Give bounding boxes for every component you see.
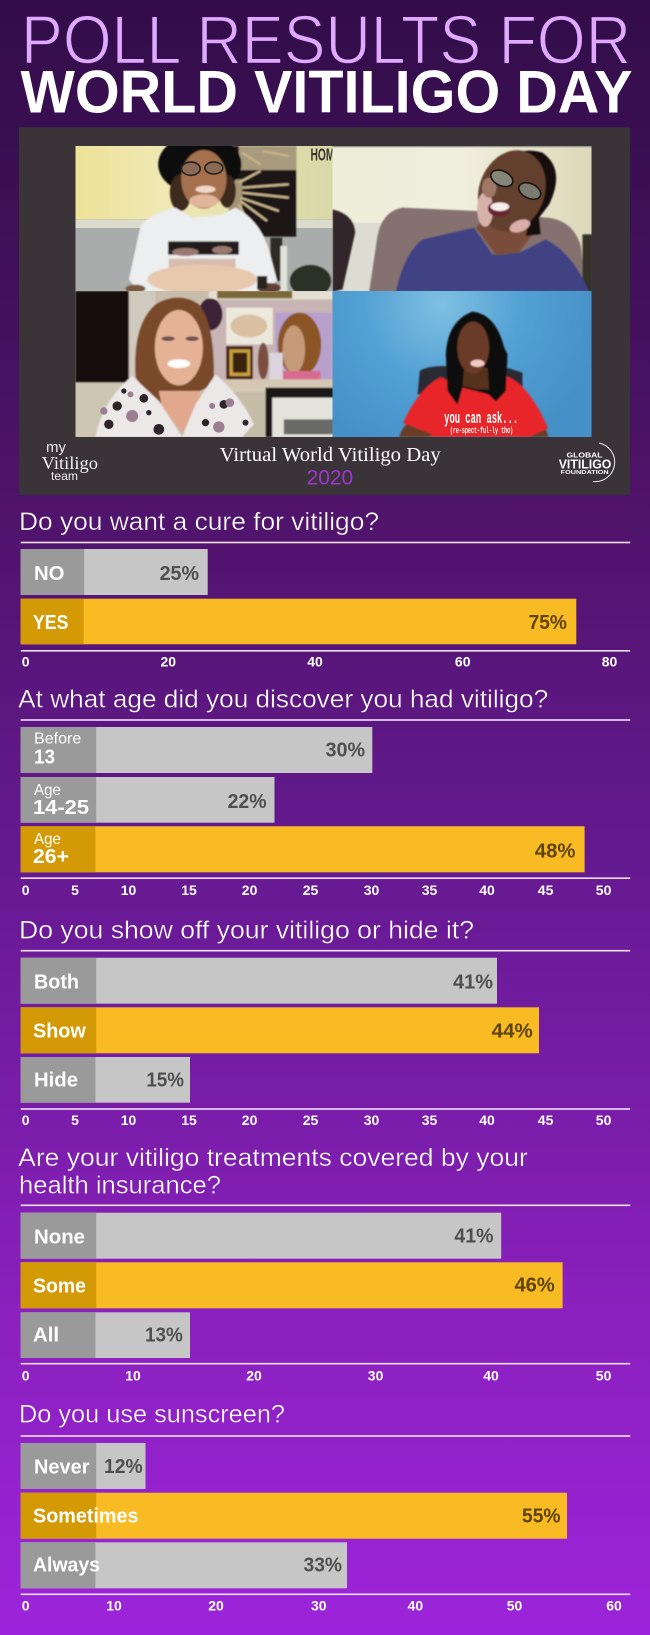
axis labels: 60 bbox=[455, 654, 471, 670]
axis labels: 50 bbox=[596, 882, 612, 898]
bar: age 14-25 22%: 22% bbox=[228, 791, 267, 813]
caption year: 2020 bbox=[307, 466, 353, 490]
bar: both 41% bbox=[21, 958, 497, 1004]
bar: never 12%: 12% bbox=[104, 1456, 143, 1478]
axis labels: 40 bbox=[307, 654, 323, 670]
bar: hide 15%: Hide bbox=[34, 1070, 78, 1092]
axis labels: 25 bbox=[303, 882, 318, 898]
photo: woman in red shirt: you can ask... bbox=[444, 410, 518, 429]
axis labels bbox=[22, 1368, 612, 1384]
bar: before 13 30%: 13 bbox=[34, 746, 55, 768]
panel: video call photo bbox=[19, 127, 630, 495]
photo: woman in black hat bbox=[76, 146, 332, 291]
logo: Global Vitiligo Foundation: FOUNDATION bbox=[561, 470, 609, 476]
axis labels: 5 bbox=[71, 1112, 79, 1128]
question heading: Do you use sunscreen? bbox=[19, 1401, 285, 1429]
bar: age 14-25 22%: 14-25 bbox=[33, 797, 89, 819]
axis labels: 50 bbox=[596, 1368, 612, 1384]
photo: woman in red shirt: (re-spect-ful-ly tho) bbox=[450, 426, 513, 436]
bar: sometimes 55%: Sometimes bbox=[33, 1505, 138, 1527]
bar: no 25% bbox=[21, 549, 208, 595]
axis labels: 10 bbox=[125, 1368, 141, 1384]
axis labels: 50 bbox=[596, 1112, 612, 1128]
axis labels: 0 bbox=[22, 882, 30, 898]
bar: before 13 30%: Before bbox=[34, 730, 81, 747]
bar: sometimes 55%: 55% bbox=[522, 1505, 561, 1527]
bar: yes 75% bbox=[21, 599, 576, 644]
panel: insurance coverage bbox=[18, 1144, 630, 1384]
axis labels: 0 bbox=[22, 1368, 30, 1384]
logo: Global Vitiligo Foundation: GLOBAL bbox=[566, 451, 603, 460]
bar: all 13%: All bbox=[33, 1325, 59, 1347]
logo: myVitiligo team: my bbox=[46, 439, 66, 456]
axis labels: 30 bbox=[364, 882, 379, 898]
bar: yes 75%: YES bbox=[33, 612, 68, 634]
question heading bbox=[18, 1144, 528, 1199]
bar: none 41%: None bbox=[34, 1226, 85, 1248]
logo: Global Vitiligo Foundation bbox=[559, 443, 615, 482]
question heading: Are your vitiligo treatments covered by your bbox=[18, 1144, 528, 1172]
photo: woman in blue shirt bbox=[332, 141, 592, 292]
axis labels: 0 bbox=[22, 654, 30, 670]
axis labels: 60 bbox=[606, 1598, 622, 1614]
axis labels: 40 bbox=[483, 1368, 499, 1384]
axis labels: 20 bbox=[242, 1112, 258, 1128]
bar: no 25%: 25% bbox=[160, 563, 199, 585]
axis labels: 10 bbox=[121, 882, 136, 898]
bar: hide 15% bbox=[21, 1057, 190, 1103]
axis labels bbox=[22, 1112, 612, 1128]
panel: age of discovery bbox=[18, 686, 630, 898]
axis labels: 0 bbox=[22, 1598, 30, 1614]
axis labels: 40 bbox=[408, 1598, 423, 1614]
axis labels: 25 bbox=[303, 1112, 318, 1128]
axis labels bbox=[22, 1598, 622, 1614]
axis labels: 40 bbox=[479, 882, 495, 898]
bar: show 44%: 44% bbox=[492, 1020, 533, 1042]
photo: woman with brown hair bbox=[76, 291, 333, 437]
bar: both 41%: 41% bbox=[453, 971, 493, 993]
axis labels: 15 bbox=[181, 882, 197, 898]
question heading: Do you show off your vitiligo or hide it? bbox=[19, 916, 474, 944]
bar: always 33%: Always bbox=[33, 1555, 100, 1577]
axis labels: 40 bbox=[479, 1112, 495, 1128]
bar: always 33%: 33% bbox=[304, 1555, 342, 1577]
bar: none 41%: 41% bbox=[454, 1226, 494, 1248]
logo: myVitiligo team bbox=[42, 439, 98, 483]
axis labels bbox=[22, 654, 617, 670]
bar: age 26+ 48% bbox=[21, 826, 585, 872]
bar: age 26+ 48%: 48% bbox=[535, 841, 576, 863]
bar: before 13 30%: 30% bbox=[326, 740, 365, 762]
axis labels: 20 bbox=[246, 1368, 262, 1384]
axis labels: 5 bbox=[71, 882, 79, 898]
bar: never 12% bbox=[21, 1443, 146, 1489]
title line 2: WORLD VITILIGO DAY bbox=[20, 59, 632, 126]
photo: woman in red shirt bbox=[332, 291, 592, 437]
bar: sometimes 55% bbox=[21, 1493, 567, 1539]
axis labels: 20 bbox=[208, 1598, 224, 1614]
axis labels: 45 bbox=[538, 882, 554, 898]
axis labels: 35 bbox=[422, 1112, 437, 1128]
question heading: health insurance? bbox=[19, 1171, 221, 1199]
bar: before 13 30% bbox=[21, 727, 372, 773]
bar: none 41% bbox=[21, 1213, 501, 1259]
bar: never 12%: Never bbox=[34, 1456, 90, 1478]
axis labels: 30 bbox=[368, 1368, 384, 1384]
bar: no 25%: NO bbox=[34, 563, 64, 585]
bar: show 44%: Show bbox=[33, 1020, 86, 1042]
axis labels: 50 bbox=[507, 1598, 522, 1614]
bar: age 14-25 22%: Age bbox=[34, 782, 61, 799]
bar: some 46%: Some bbox=[33, 1275, 86, 1297]
logo: myVitiligo team: Vitiligo bbox=[42, 453, 98, 473]
axis labels: 10 bbox=[106, 1598, 122, 1614]
axis labels: 30 bbox=[311, 1598, 327, 1614]
axis labels: 10 bbox=[121, 1112, 136, 1128]
bar: all 13% bbox=[21, 1312, 190, 1358]
bar: always 33% bbox=[21, 1542, 347, 1588]
axis labels bbox=[22, 882, 612, 898]
axis labels: 80 bbox=[602, 654, 617, 670]
axis labels: 35 bbox=[422, 882, 437, 898]
photo: woman in black hat: HOM bbox=[310, 145, 334, 165]
bar: yes 75%: 75% bbox=[529, 612, 567, 634]
logo: myVitiligo team: team bbox=[51, 469, 78, 483]
bar: show 44% bbox=[21, 1007, 539, 1053]
panel: do you want a cure bbox=[19, 508, 630, 670]
question heading: Do you want a cure for vitiligo? bbox=[19, 508, 379, 536]
bar: age 26+ 48%: Age bbox=[34, 831, 61, 848]
question heading: At what age did you discover you had vitiligo? bbox=[18, 686, 548, 714]
axis labels: 20 bbox=[161, 654, 176, 670]
bar: some 46%: 46% bbox=[514, 1275, 555, 1297]
axis labels: 45 bbox=[538, 1112, 554, 1128]
photo caption: Virtual World Vitiligo Day bbox=[220, 445, 441, 466]
axis labels: 30 bbox=[364, 1112, 379, 1128]
bar: both 41%: Both bbox=[34, 971, 79, 993]
axis labels: 0 bbox=[22, 1112, 30, 1128]
panel: sunscreen use bbox=[19, 1401, 630, 1614]
logo: Global Vitiligo Foundation: VITILIGO bbox=[559, 456, 611, 471]
axis labels: 15 bbox=[181, 1112, 197, 1128]
bar: hide 15%: 15% bbox=[146, 1070, 184, 1092]
bar: all 13%: 13% bbox=[145, 1325, 183, 1347]
bar: some 46% bbox=[21, 1262, 563, 1308]
panel: show or hide bbox=[19, 916, 630, 1128]
bar: age 26+ 48%: 26+ bbox=[33, 846, 69, 868]
title bbox=[20, 1, 632, 126]
bar: age 14-25 22% bbox=[21, 777, 275, 823]
axis labels: 20 bbox=[242, 882, 258, 898]
